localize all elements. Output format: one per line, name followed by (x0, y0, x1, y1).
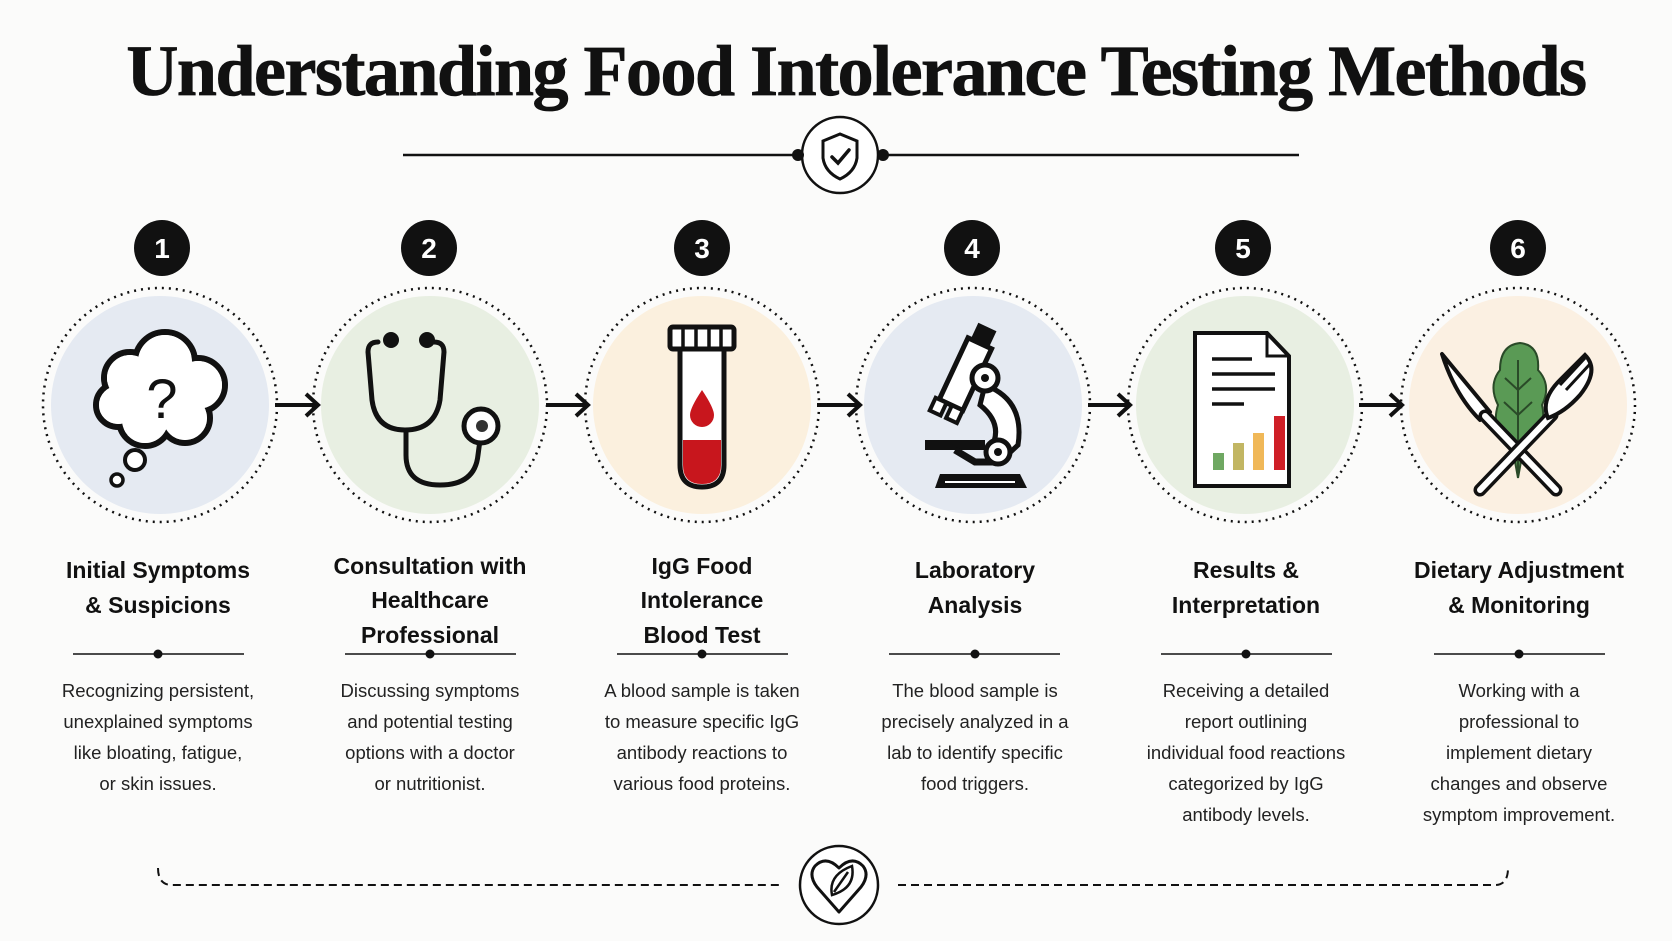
badge 1: 1 (154, 233, 170, 264)
title: Understanding Food Intolerance Testing Methods (126, 31, 1586, 111)
bottom dashed bracket with heart icon (158, 846, 1508, 924)
description 6: changes and observe (1431, 773, 1607, 794)
title divider with shield icon (403, 117, 1299, 193)
badge 5 (1215, 220, 1271, 276)
heading 3: Blood Test (643, 622, 761, 648)
heading 3: IgG Food (652, 553, 752, 579)
badge 2: 2 (421, 233, 437, 264)
heading 5 (1172, 557, 1320, 618)
description 6: professional to (1459, 711, 1579, 732)
badge 1 (134, 220, 190, 276)
heading 3: Intolerance (641, 587, 763, 613)
heading 3 (641, 553, 763, 648)
heading 4 (915, 557, 1035, 618)
description 6: Working with a (1459, 680, 1580, 701)
arrow 5-6 (1359, 394, 1402, 416)
step 4 (856, 220, 1090, 794)
step 6 (1401, 220, 1635, 825)
description 5: antibody levels. (1182, 804, 1310, 825)
step 3 (585, 220, 819, 794)
badge 4: 4 (964, 233, 980, 264)
badge 2 (401, 220, 457, 276)
heading 2 (334, 553, 526, 648)
description 2: Discussing symptoms (341, 680, 519, 701)
description 3: A blood sample is taken (604, 680, 800, 701)
badge 5: 5 (1235, 233, 1251, 264)
description 4: precisely analyzed in a (881, 711, 1069, 732)
description 4: food triggers. (921, 773, 1029, 794)
description 6 (1423, 680, 1615, 825)
step 1 (43, 220, 277, 794)
description 1 (62, 680, 254, 794)
description 2: options with a doctor (345, 742, 515, 763)
description 3 (604, 680, 800, 794)
heading 1: Initial Symptoms (66, 557, 250, 583)
description 4: The blood sample is (892, 680, 1058, 701)
description 6: implement dietary (1446, 742, 1593, 763)
heading 6: & Monitoring (1448, 592, 1590, 618)
badge 3: 3 (694, 233, 710, 264)
arrow 3-4 (817, 394, 860, 416)
description 5: categorized by IgG (1168, 773, 1324, 794)
description 2: or nutritionist. (374, 773, 486, 794)
circle 1 with thought cloud icon: ? (146, 367, 178, 430)
description 1: Recognizing persistent, (62, 680, 254, 701)
heading 4: Laboratory (915, 557, 1035, 583)
heading 2: Professional (361, 622, 499, 648)
description 5: Receiving a detailed (1163, 680, 1329, 701)
description 3: antibody reactions to (617, 742, 787, 763)
description 4 (881, 680, 1069, 794)
heading 1: & Suspicions (85, 592, 231, 618)
description 2: and potential testing (347, 711, 513, 732)
step 5 (1128, 220, 1362, 825)
arrow 2-3 (546, 394, 588, 416)
circle 2 with stethoscope icon (313, 288, 547, 522)
circle 6 with cutlery and leaf icon (1401, 288, 1635, 522)
description 4: lab to identify specific (887, 742, 1063, 763)
heading 1 (66, 557, 250, 618)
description 5: report outlining (1185, 711, 1307, 732)
heading 5: Interpretation (1172, 592, 1320, 618)
heading 6: Dietary Adjustment (1414, 557, 1624, 583)
badge 6: 6 (1510, 233, 1526, 264)
heading 4: Analysis (928, 592, 1022, 618)
arrow 4-5 (1088, 394, 1130, 416)
description 1: unexplained symptoms (63, 711, 253, 732)
heading 6 (1414, 557, 1624, 618)
description 3: to measure specific IgG (605, 711, 799, 732)
badge 4 (944, 220, 1000, 276)
circle 3 with test tube icon (585, 288, 819, 522)
step 2 (313, 220, 547, 794)
description 1: or skin issues. (99, 773, 217, 794)
heading 2: Healthcare (371, 587, 489, 613)
circle 5 with report icon (1128, 288, 1362, 522)
heading 2: Consultation with (334, 553, 526, 579)
description 2 (341, 680, 519, 794)
heading 5: Results & (1193, 557, 1299, 583)
description 5 (1147, 680, 1345, 825)
description 6: symptom improvement. (1423, 804, 1615, 825)
badge 6 (1490, 220, 1546, 276)
description 1: like bloating, fatigue, (74, 742, 242, 763)
circle 4 with microscope icon (856, 288, 1090, 522)
badge 3 (674, 220, 730, 276)
description 5: individual food reactions (1147, 742, 1345, 763)
description 3: various food proteins. (614, 773, 790, 794)
arrow 1-2 (275, 394, 318, 416)
circle 1 with thought cloud icon (43, 288, 277, 522)
